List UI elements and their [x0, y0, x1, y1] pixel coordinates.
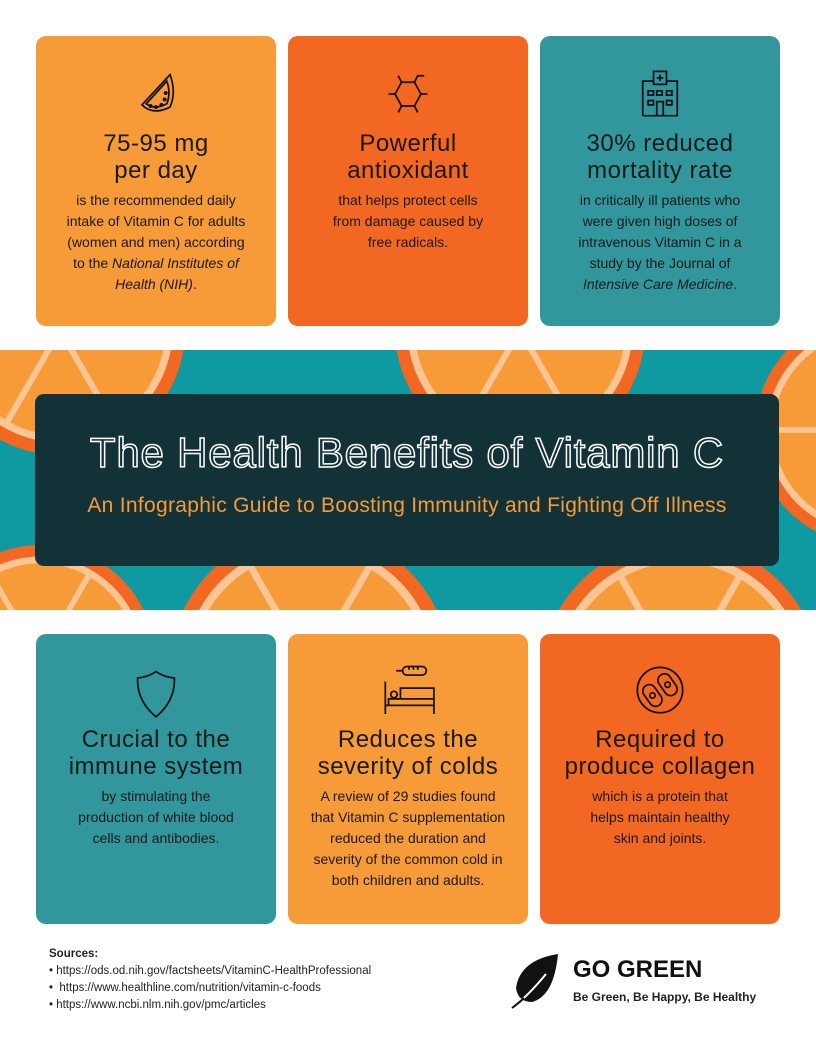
logo: go green: Be Green, Be Happy, Be Healthy	[573, 990, 756, 1004]
text: Health (NIH).	[115, 276, 197, 292]
text: that helps protect cells	[338, 192, 478, 208]
text: in critically ill patients who	[580, 192, 740, 208]
sources: Sources:	[49, 948, 98, 960]
text: both children and adults.	[332, 872, 484, 888]
heading: mortality rate	[587, 157, 733, 184]
text: reduced the duration and	[330, 830, 486, 846]
heading: Required to	[595, 726, 725, 753]
sources: • https://www.ncbi.nlm.nih.gov/pmc/articles	[49, 999, 266, 1011]
sources: • https://ods.od.nih.gov/factsheets/VitaminC-HealthProfessional	[49, 965, 371, 977]
heading	[587, 130, 733, 184]
text: by stimulating the	[102, 788, 210, 804]
text	[311, 788, 505, 888]
card: antioxidant	[288, 36, 528, 326]
icon: cells	[636, 666, 684, 714]
heading	[565, 726, 755, 780]
heading	[69, 726, 243, 780]
text: cells and antibodies.	[93, 830, 219, 846]
title box	[35, 394, 779, 566]
logo: go green: GO GREEN	[573, 956, 702, 983]
text: severity of the common cold in	[313, 851, 503, 867]
icon: molecule	[388, 74, 428, 113]
title: The Health Benefits of Vitamin C	[90, 429, 724, 476]
card: collagen	[540, 634, 780, 924]
subtitle: An Infographic Guide to Boosting Immunity and Fighting Off Illness	[87, 494, 727, 517]
icon: watermelon	[140, 73, 174, 112]
icon: hospital	[642, 70, 678, 116]
text	[67, 192, 245, 292]
text	[78, 788, 234, 846]
text: to the National Institutes of	[73, 255, 239, 271]
heading	[318, 726, 498, 780]
text: production of white blood	[78, 809, 234, 825]
text	[590, 788, 730, 846]
text: intake of Vitamin C for adults	[67, 213, 245, 229]
heading: Powerful	[359, 130, 457, 157]
text: study by the Journal of	[590, 255, 730, 271]
text: which is a protein that	[592, 788, 728, 804]
text: Intensive Care Medicine.	[583, 276, 737, 292]
heading	[347, 130, 469, 184]
text: free radicals.	[368, 234, 448, 250]
card: immune	[36, 634, 276, 924]
icon: bed thermometer	[384, 666, 435, 714]
heading: 75-95 mg	[103, 130, 209, 157]
logo: go green	[512, 954, 756, 1009]
text: helps maintain healthy	[590, 809, 730, 825]
text: skin and joints.	[614, 830, 706, 846]
heading: antioxidant	[347, 157, 469, 184]
text: intravenous Vitamin C in a	[578, 234, 742, 250]
icon: leaf	[512, 954, 558, 1009]
text: were given high doses of	[583, 213, 737, 229]
text	[333, 192, 484, 250]
banner background with orange slices	[0, 350, 816, 610]
sources: • https://www.healthline.com/nutrition/vitamin-c-foods	[49, 982, 321, 994]
text	[578, 192, 742, 292]
text: from damage caused by	[333, 213, 483, 229]
heading	[103, 130, 209, 184]
heading: 30% reduced	[587, 130, 733, 157]
text: that Vitamin C supplementation	[311, 809, 505, 825]
text: A review of 29 studies found	[320, 788, 496, 804]
card: colds	[288, 634, 528, 924]
heading: Reduces the	[338, 726, 478, 753]
card: 75-95 mg	[36, 36, 276, 326]
card: mortality	[540, 36, 780, 326]
text: is the recommended daily	[76, 192, 236, 208]
sources	[49, 948, 371, 1011]
heading: immune system	[69, 753, 243, 780]
heading: produce collagen	[565, 753, 755, 780]
heading: severity of colds	[318, 753, 498, 780]
heading: Crucial to the	[82, 726, 230, 753]
heading: per day	[114, 157, 198, 184]
text: (women and men) according	[67, 234, 245, 250]
icon: shield	[136, 670, 176, 718]
